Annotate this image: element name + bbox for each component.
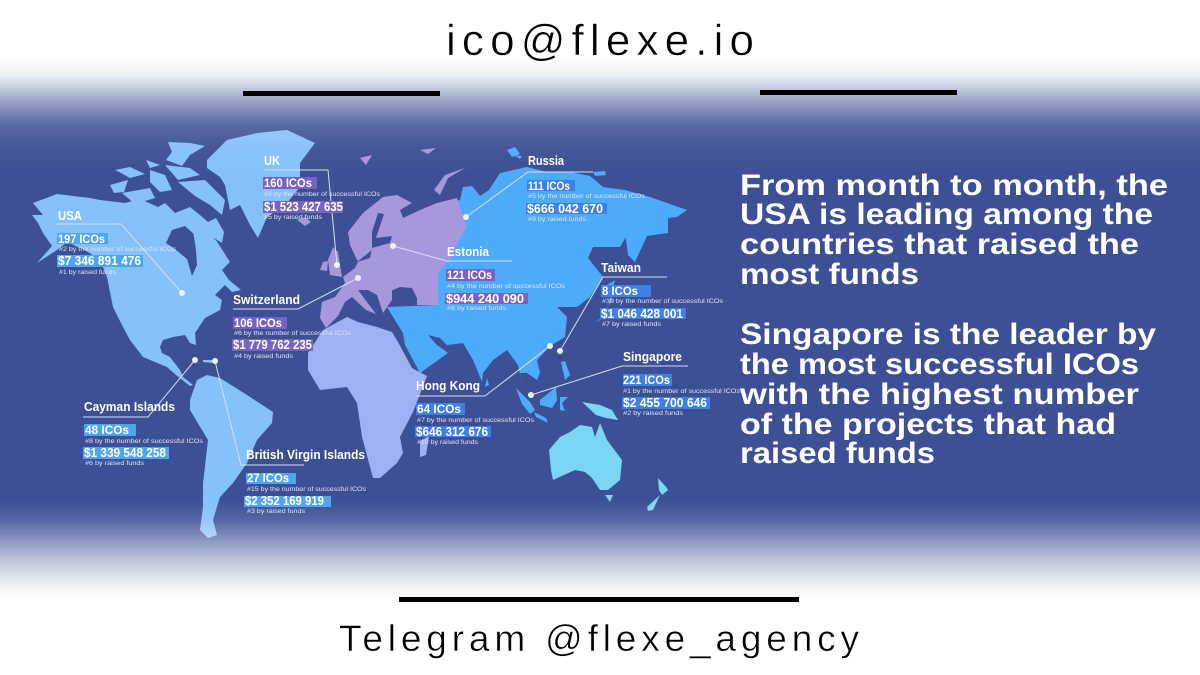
Greenland <box>207 130 315 238</box>
world map <box>32 130 687 538</box>
callout: UK: $1 523 427 635 <box>264 199 343 214</box>
text block: Singapore leader: of the projects that had <box>740 408 1116 441</box>
callout: Cayman Islands: #6 by raised funds <box>85 460 145 467</box>
callout: Hong Kong <box>415 343 553 446</box>
callout: Hong Kong: $646 312 676 <box>416 424 488 439</box>
callout: Estonia <box>390 243 566 312</box>
callout: Switzerland: #6 by the number of successful ICOs <box>234 330 352 337</box>
callout: Singapore: $2 455 700 646 <box>623 395 707 410</box>
callout: Singapore: Singapore <box>623 350 682 364</box>
right rule <box>760 90 957 95</box>
callout: Taiwan: #39 by the number of successful ICOs <box>602 298 724 305</box>
callout: USA: $7 346 891 476 <box>58 253 141 268</box>
callout: Estonia: 121 ICOs <box>447 268 492 282</box>
callout: UK: UK <box>264 154 280 168</box>
bottom rule <box>399 597 799 602</box>
callout: UK: #3 by the number of successful ICOs <box>264 191 381 198</box>
callout: UK <box>263 154 381 268</box>
callout: Taiwan <box>557 261 724 354</box>
callout: Singapore: #2 by raised funds <box>623 410 684 417</box>
heading: email: ico@flexe.io <box>446 16 754 65</box>
text block: USA leading: USA is leading among the <box>740 198 1153 231</box>
callout: Estonia: $944 240 090 <box>446 291 524 306</box>
callout: Switzerland: Switzerland <box>233 293 300 307</box>
footer: Telegram handle: Telegram @flexe_agency <box>339 618 860 659</box>
callout: Taiwan: $1 046 428 001 <box>601 306 683 321</box>
callout: Singapore: 221 ICOs <box>623 373 670 387</box>
callout: Switzerland: $1 779 762 235 <box>233 337 312 352</box>
callout: Taiwan: Taiwan <box>601 261 641 275</box>
callout: USA: #1 by raised funds <box>59 269 117 276</box>
text block: Singapore leader: the most successful ICOs <box>740 348 1139 381</box>
callout: Cayman Islands: 48 ICOs <box>85 423 129 437</box>
left rule <box>243 91 440 96</box>
text block: Singapore leader: raised funds <box>740 437 935 470</box>
callout: British Virgin Islands: #15 by the number of successful ICOs <box>247 486 367 493</box>
North America <box>32 142 241 386</box>
callout: Hong Kong: #7 by the number of successful ICOs <box>417 417 535 424</box>
callout: Estonia: #4 by the number of successful ICOs <box>447 283 566 290</box>
text block: USA leading: most funds <box>740 258 919 291</box>
callout: British Virgin Islands: $2 352 169 919 <box>245 493 324 508</box>
callout: USA <box>56 209 185 296</box>
callout: Estonia: #8 by raised funds <box>447 305 507 312</box>
callout: Russia: #9 by raised funds <box>528 216 587 223</box>
Baltic sea <box>357 213 392 262</box>
text block: USA leading: From month to month, the <box>740 169 1168 202</box>
bottom fade <box>0 500 1200 597</box>
Black sea <box>393 287 417 304</box>
callout: Hong Kong: 64 ICOs <box>417 402 461 416</box>
callout: USA: USA <box>58 209 82 223</box>
callout: Hong Kong: #10 by raised funds <box>417 439 479 446</box>
callout: Cayman Islands: $1 339 548 258 <box>84 445 166 460</box>
Africa <box>308 317 429 478</box>
South America <box>190 375 273 538</box>
callout: Russia: $666 042 670 <box>527 201 603 216</box>
text block: Singapore leader: with the highest number <box>739 378 1139 411</box>
callout: Singapore <box>528 350 741 417</box>
callout: Russia: #5 by the number of successful ICOs <box>528 193 646 200</box>
callout: Cayman Islands: Cayman Islands <box>84 400 175 414</box>
callout: UK: #5 by raised funds <box>264 214 323 221</box>
callout: Russia: 111 ICOs <box>528 179 570 193</box>
callout: Hong Kong: Hong Kong <box>416 379 480 393</box>
top fade <box>0 55 1200 175</box>
callout: British Virgin Islands: 27 ICOs <box>247 471 289 485</box>
Asia <box>387 147 687 423</box>
callout: British Virgin Islands: #3 by raised funds <box>247 508 306 515</box>
callout: USA: 197 ICOs <box>58 232 105 246</box>
callout: Cayman Islands <box>83 357 204 467</box>
callout: Switzerland: #4 by raised funds <box>234 353 294 360</box>
text block: USA leading <box>740 169 1168 291</box>
callout: Switzerland: 106 ICOs <box>234 316 282 330</box>
callout: Singapore: #1 by the number of successful ICOs <box>623 388 741 395</box>
text block: Singapore leader <box>739 318 1156 470</box>
callout: Taiwan: 8 ICOs <box>602 284 638 298</box>
callout: Estonia: Estonia <box>447 245 490 259</box>
Australia and New Zealand <box>549 402 668 511</box>
callout: Russia: Russia <box>528 154 565 168</box>
Europe and western Russia <box>297 148 467 328</box>
callout: Cayman Islands: #8 by the number of successful ICOs <box>85 438 204 445</box>
callout: British Virgin Islands: British Virgin Islands <box>246 448 365 462</box>
text block: Singapore leader: Singapore is the leader by <box>740 318 1156 351</box>
callout: UK: 160 ICOs <box>264 176 312 190</box>
callout: British Virgin Islands <box>212 358 367 515</box>
callout: USA: #2 by the number of successful ICOs <box>59 246 177 253</box>
callout: Russia <box>463 154 646 223</box>
callout: Taiwan: #7 by raised funds <box>602 321 662 328</box>
text block: USA leading: countries that raised the <box>740 228 1139 261</box>
callout: Switzerland <box>232 275 361 360</box>
